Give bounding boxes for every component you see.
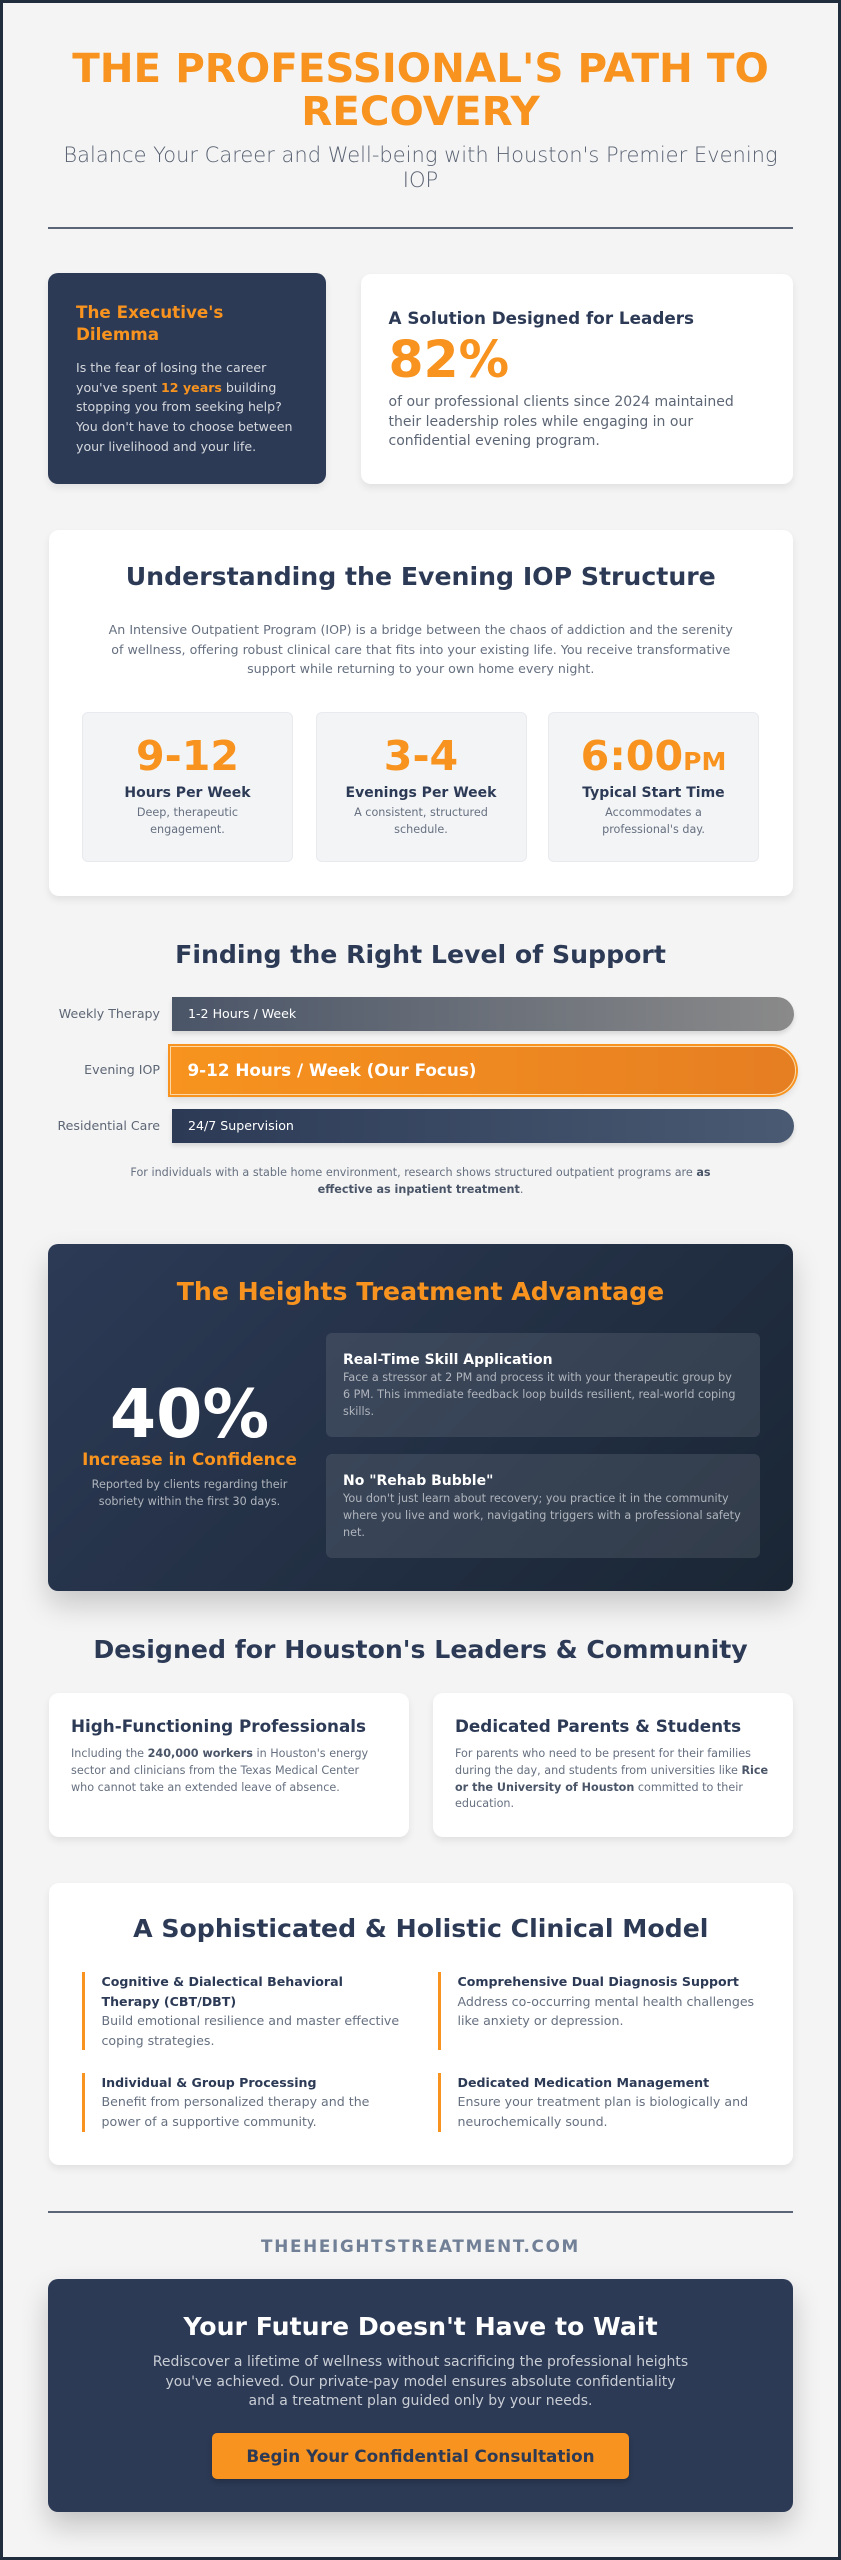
panel: solution for leaders bbox=[360, 274, 793, 484]
bar: residential care: 24/7 Supervision bbox=[188, 1118, 294, 1133]
card text: during the day, and students from universities like Rice bbox=[455, 1764, 768, 1777]
bar: evening IOP focus bbox=[170, 1046, 796, 1094]
bar: residential care bbox=[172, 1109, 794, 1143]
card text: or the University of Houston committed to their bbox=[455, 1781, 743, 1794]
description: evenings bbox=[354, 806, 488, 836]
text: cta description: and a treatment plan guided only by your needs. bbox=[248, 2393, 592, 2409]
description: hours: Deep, therapeutic bbox=[137, 806, 238, 819]
text: IOP description: of wellness, offering robust clinical care that fits into your existing life. You receive transformative bbox=[111, 642, 730, 656]
number: 40%: 40% bbox=[110, 1375, 269, 1453]
box title: No "Rehab Bubble" bbox=[343, 1473, 493, 1489]
card title: High-Functioning Professionals bbox=[71, 1716, 366, 1736]
stat: 82%: 82% bbox=[388, 330, 509, 389]
title: RECOVERY bbox=[301, 87, 540, 135]
number: 9-12: 9-12 bbox=[136, 732, 239, 780]
item text: Address co-occurring mental health challenges bbox=[458, 1994, 754, 2009]
heading: designed for Houston's leaders: Designed for Houston's Leaders & Community bbox=[93, 1635, 748, 1664]
note: outpatient research bbox=[130, 1166, 711, 1196]
box text bbox=[343, 1371, 735, 1418]
item text bbox=[102, 1974, 399, 2048]
text: IOP description bbox=[108, 622, 733, 676]
item: individual and group processing bbox=[82, 2072, 402, 2132]
item text: Therapy (CBT/DBT) bbox=[102, 1994, 236, 2009]
subtitle: Balance Your Career and Well-being with Houston's Premier Evening bbox=[63, 142, 778, 166]
box title: Real-Time Skill Application bbox=[343, 1352, 553, 1368]
heading: sophisticated holistic clinical model: A Sophisticated & Holistic Clinical Model bbox=[133, 1914, 708, 1943]
item text: Cognitive & Dialectical Behavioral bbox=[102, 1974, 343, 1989]
card text: education. bbox=[455, 1797, 514, 1810]
item: dual diagnosis bbox=[438, 1972, 758, 2050]
heading: your future: Your Future Doesn't Have to Wait bbox=[183, 2312, 658, 2341]
description: hours: engagement. bbox=[150, 823, 225, 836]
item text: Ensure your treatment plan is biologically and bbox=[458, 2094, 748, 2109]
text: dilemma description: Is the fear of losing the career bbox=[76, 360, 266, 375]
title bbox=[72, 44, 769, 135]
chart: levels of support bbox=[57, 997, 798, 1196]
text: dilemma description: stopping you from seeking help? bbox=[76, 399, 282, 414]
text: cta description bbox=[153, 2354, 688, 2409]
panel: clinical model bbox=[48, 1882, 793, 2165]
description: confidence bbox=[92, 1478, 288, 1508]
text: dilemma description: your livelihood and your life. bbox=[76, 439, 256, 454]
note: outpatient research: For individuals with a stable home environment, research shows structured outpatient programs are as bbox=[130, 1166, 711, 1179]
bar: weekly therapy: 1-2 Hours / Week bbox=[188, 1006, 296, 1021]
number: 6:00 PM: 6:00PM bbox=[581, 732, 726, 780]
text: solution description: of our professional clients since 2024 maintained bbox=[388, 394, 734, 410]
item text: like anxiety or depression. bbox=[458, 2013, 623, 2028]
box text bbox=[343, 1492, 741, 1539]
box text: Face a stressor at 2 PM and process it with your therapeutic group by bbox=[343, 1371, 732, 1384]
heading: solution designed for leaders: A Solution Designed for Leaders bbox=[388, 308, 694, 328]
item text bbox=[458, 1974, 754, 2028]
note: outpatient research: effective as inpatient treatment. bbox=[318, 1183, 523, 1196]
item: medication management bbox=[438, 2072, 758, 2132]
label: evening IOP: Evening IOP bbox=[84, 1062, 160, 1077]
item text: Dedicated Medication Management bbox=[458, 2074, 709, 2090]
heading: understanding the evening IOP: Understanding the Evening IOP Structure bbox=[126, 562, 716, 591]
panel: executive's dilemma bbox=[48, 273, 326, 484]
item text: power of a supportive community. bbox=[102, 2114, 317, 2129]
text: IOP description: An Intensive Outpatient Program (IOP) is a bridge between the chaos of addiction and the serenity bbox=[109, 622, 733, 637]
description: evenings: schedule. bbox=[394, 823, 448, 836]
box text: where you live and work, navigating triggers with a professional safety bbox=[343, 1509, 741, 1522]
box: no rehab bubble bbox=[326, 1454, 760, 1558]
header bbox=[63, 44, 778, 192]
label: weekly therapy: Weekly Therapy bbox=[59, 1006, 160, 1021]
panel: evening IOP structure bbox=[48, 530, 793, 896]
item text: coping strategies. bbox=[102, 2033, 214, 2048]
website url: THEHEIGHTSTREATMENT.COM bbox=[261, 2236, 580, 2256]
item text: Individual & Group Processing bbox=[102, 2074, 317, 2090]
text: solution description: their leadership roles while engaging in our bbox=[388, 414, 693, 430]
stat card: typical start time bbox=[548, 712, 759, 862]
box text: net. bbox=[343, 1526, 365, 1539]
card text: who cannot take an extended leave of absence. bbox=[71, 1781, 340, 1794]
bar: weekly therapy bbox=[172, 997, 794, 1031]
label: increase in confidence: Increase in Confidence bbox=[82, 1449, 297, 1469]
label: typical start time: Typical Start Time bbox=[582, 785, 725, 801]
heading: the executive's dilemma: Dilemma bbox=[76, 324, 159, 344]
description: start time bbox=[602, 806, 705, 836]
number: 3-4: 3-4 bbox=[384, 732, 458, 780]
heading: finding the right level of support: Finding the Right Level of Support bbox=[175, 940, 666, 969]
button: begin consultation bbox=[212, 2433, 629, 2479]
box text: skills. bbox=[343, 1405, 374, 1418]
stat card: hours per week bbox=[82, 712, 293, 862]
heading: the executive's dilemma bbox=[76, 302, 223, 344]
text: dilemma description: You don't have to choose between bbox=[76, 419, 292, 434]
item text bbox=[102, 2074, 369, 2129]
item: CBT/DBT bbox=[82, 1972, 402, 2050]
text: cta description: Rediscover a lifetime of wellness without sacrificing the professional heights bbox=[153, 2354, 688, 2370]
subtitle: IOP bbox=[403, 168, 438, 192]
description: evenings: A consistent, structured bbox=[354, 806, 488, 819]
stat card: evenings per week bbox=[316, 712, 526, 862]
label: residential care: Residential Care bbox=[57, 1118, 160, 1133]
box text: You don't just learn about recovery; you practice it in the community bbox=[343, 1492, 729, 1505]
card text: Including the 240,000 workers in Houston's energy bbox=[71, 1747, 368, 1760]
heading: the executive's dilemma: The Executive's bbox=[76, 302, 223, 322]
item text: Comprehensive Dual Diagnosis Support bbox=[458, 1974, 739, 1989]
description: confidence: Reported by clients regarding their bbox=[92, 1478, 287, 1491]
text: IOP description: support while returning to your own home every night. bbox=[247, 661, 594, 676]
card text bbox=[71, 1747, 368, 1794]
card text bbox=[455, 1747, 768, 1810]
text: dilemma description: you've spent 12 years building bbox=[76, 380, 276, 395]
item text bbox=[458, 2074, 748, 2129]
description: confidence: sobriety within the first 30 days. bbox=[99, 1495, 280, 1508]
label: hours per week: Hours Per Week bbox=[124, 785, 251, 801]
item text: Build emotional resilience and master effective bbox=[102, 2013, 399, 2028]
box: real-time skill application bbox=[326, 1333, 760, 1437]
card text: For parents who need to be present for their families bbox=[455, 1747, 751, 1760]
card: high-functioning professionals bbox=[48, 1693, 409, 1836]
description: hours bbox=[137, 806, 238, 836]
text: solution description bbox=[388, 394, 734, 449]
text: solution description: confidential evening program. bbox=[388, 433, 600, 449]
text: cta description: you've achieved. Our private-pay model ensures absolute confidentiality bbox=[165, 2374, 676, 2390]
label: evenings per week: Evenings Per Week bbox=[346, 785, 496, 801]
card title: Dedicated Parents & Students bbox=[455, 1716, 741, 1736]
description: start time: professional's day. bbox=[602, 823, 705, 836]
text: dilemma description bbox=[76, 360, 292, 454]
description: start time: Accommodates a bbox=[605, 806, 702, 819]
panel: call to action bbox=[48, 2279, 793, 2512]
button: begin consultation: Begin Your Confidential Consultation bbox=[246, 2446, 595, 2466]
bar: evening IOP focus: 9-12 Hours / Week (Our Focus) bbox=[188, 1060, 476, 1080]
subtitle bbox=[63, 142, 778, 192]
title: THE PROFESSIONAL'S PATH TO bbox=[72, 44, 769, 92]
panel: heights treatment advantage bbox=[48, 1244, 793, 1591]
stat: 40% increase in confidence bbox=[82, 1375, 297, 1508]
box text: 6 PM. This immediate feedback loop builds resilient, real-world coping bbox=[343, 1388, 735, 1401]
heading: the heights treatment advantage: The Heights Treatment Advantage bbox=[177, 1277, 664, 1306]
item text: neurochemically sound. bbox=[458, 2114, 608, 2129]
item text: Benefit from personalized therapy and the bbox=[102, 2094, 369, 2109]
card text: sector and clinicians from the Texas Medical Center bbox=[71, 1764, 359, 1777]
card: dedicated parents and students bbox=[432, 1693, 793, 1836]
